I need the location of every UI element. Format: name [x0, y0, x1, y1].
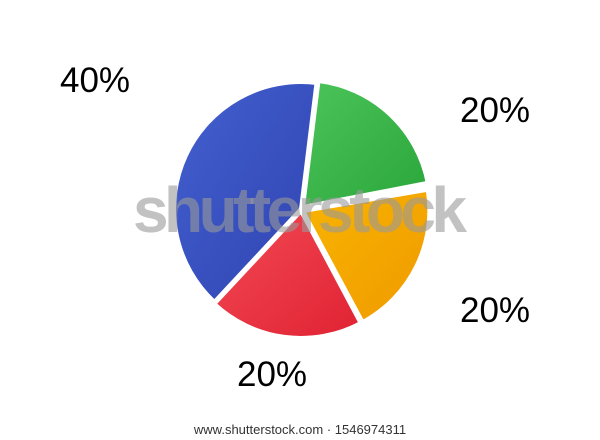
label: 40%: 40% [60, 61, 130, 100]
slice: red 20% [214, 211, 361, 338]
slice: yellow 20% [303, 190, 429, 322]
slice: blue 40% [174, 82, 316, 302]
slice: green 20% [303, 81, 428, 207]
label: 20% red: 20% [237, 355, 307, 394]
footer: www.shutterstock.com · 1546974311 [194, 422, 406, 437]
watermark: shutterstock [133, 174, 467, 246]
label: 20% green: 20% [460, 91, 530, 130]
label: 20% yellow: 20% [460, 291, 530, 330]
